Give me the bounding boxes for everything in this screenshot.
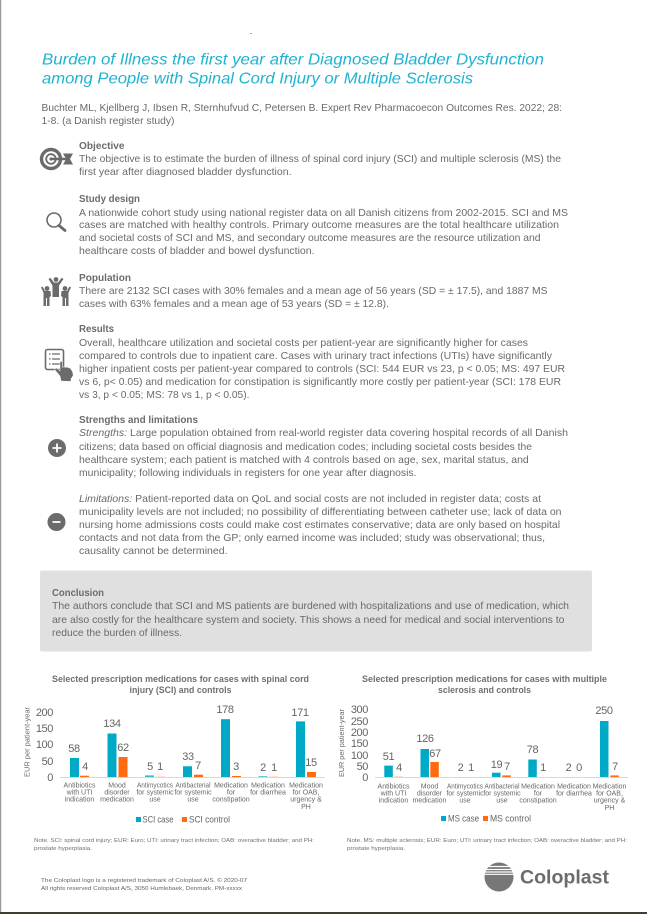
category labels: SCI: Antimycotics (137, 782, 173, 790)
category labels: SCI: use (149, 796, 161, 804)
chart title: SCI: Selected prescription medications for cases with spinal cord (52, 674, 309, 684)
bar chart: MS: 4 (396, 762, 402, 774)
text: results body: higher inpatient costs per patient-year compared to controls (SCI: 544 EUR vs 23, p < 0.05; MS: 497 EUR (79, 364, 565, 375)
bar chart: SCI: 4 (82, 761, 88, 773)
bar chart: MS: 7 (504, 761, 510, 773)
category labels: MS: for systemic (446, 790, 484, 798)
text: results body: vs 3, p < 0.05; MS: 78 vs 1, p < 0.05). (79, 390, 250, 401)
y axis: MS (337, 704, 368, 784)
icon: magnifier (47, 213, 65, 230)
category labels: SCI: Medication (289, 782, 323, 790)
text: population body: There are 2132 SCI cases with 30% females and a mean age of 56 years (SD = ± 17.5), and 1887 MS (79, 286, 548, 297)
text: limitations: municipality levels are not included; no possibility of differentiating between catheter use; lack of data on (79, 507, 562, 518)
text: study design body (79, 208, 568, 257)
y axis: SCI: 50 (42, 756, 53, 768)
category labels: MS: disorder (417, 790, 443, 798)
heading: conclusion: Conclusion (52, 588, 104, 599)
panel: strengths and limitations (48, 415, 568, 557)
legend: SCI: SCI control (189, 814, 230, 824)
category labels: SCI: with UTI (66, 790, 92, 796)
note: SCI: Note. SCI: spinal cord injury; EUR: Euro; UTI: urinary tract infection; OAB: overactive bladder; and PH: (34, 838, 314, 844)
icon: document with hand (46, 350, 73, 382)
category labels: SCI: Medication (214, 782, 248, 790)
category labels: MS: Mood (421, 784, 438, 790)
y axis: SCI: 150 (36, 723, 53, 735)
text: objective body: The objective is to estimate the burden of illness of spinal cord injury (SCI) and multiple sclerosis (MS) the (79, 154, 561, 165)
text: limitations: contacts and not data from the GP; only earned income was included; study was observational; thus, (79, 533, 545, 544)
text: results body: Overall, healthcare utilization and societal costs per patient-year are significantly higher for cases (79, 338, 528, 349)
text: population body (79, 286, 548, 310)
category labels: SCI: constipation (212, 796, 250, 804)
category labels: SCI: indication (65, 796, 94, 804)
text: strengths: municipality; following individuals in registers for one year after diagnosis. (79, 468, 416, 479)
heading: results: Results (79, 324, 114, 335)
category labels: SCI: for (227, 790, 236, 796)
bar chart: MS: 2 (458, 762, 464, 774)
category labels: SCI: for OAB, (293, 790, 319, 796)
text: conclusion body (52, 601, 569, 639)
chart title: SCI (52, 674, 309, 695)
category labels: MS: for OAB, (596, 790, 623, 798)
category labels: MS (378, 784, 627, 812)
y axis: SCI: EUR per patient-year (22, 706, 32, 777)
category labels: MS: medication (413, 798, 447, 804)
legend: SCI: SCI case (142, 814, 174, 824)
y axis: MS: 100 (351, 750, 368, 762)
panel: results (46, 324, 565, 401)
text: conclusion body: The authors conclude that SCI and MS patients are burdened with hospitalizations and use of medication, which (52, 601, 569, 612)
bar chart: SCI: 134 (103, 718, 121, 730)
note: MS: prostate hyperplasia. (347, 846, 405, 852)
logo: Coloplast (484, 862, 610, 892)
category labels: MS: Antibacterial (484, 784, 520, 790)
category labels: SCI: Mood (108, 782, 126, 790)
bar chart: SCI: 1 (157, 761, 163, 773)
bar chart: SCI (60, 704, 325, 778)
category labels: MS: Antimycotics (447, 784, 483, 790)
footer legal text: All rights reserved Coloplast A/S, 3050 Humlebaek, Denmark. PM-xxxxx (41, 886, 242, 892)
bar chart: MS: 2 (566, 762, 572, 774)
bar chart: MS: 78 (527, 744, 538, 756)
category labels: MS: PH (605, 805, 614, 812)
category labels: SCI: medication (100, 796, 134, 804)
chart title: MS: Selected prescription medications for cases with multiple (362, 674, 607, 684)
icon: target (42, 150, 73, 168)
bar chart: SCI: 178 (216, 704, 234, 716)
bar chart: SCI: 7 (195, 760, 201, 772)
bar chart: SCI: 171 (291, 707, 309, 719)
text: limitations: causality cannot be determined. (79, 546, 228, 557)
legend: MS: MS control (490, 814, 531, 824)
text: results body: compared to controls due to inpatient care. Cases with urinary tract infections (UTIs) have significantly (79, 351, 553, 362)
y axis: SCI (22, 706, 53, 784)
citation (42, 103, 562, 127)
footer legal text: The Coloplast logo is a registered trademark of Coloplast A/S. © 2020-07 (41, 877, 247, 884)
category labels: MS: for diarrhea (556, 790, 592, 798)
bar chart: SCI: 2 (260, 762, 266, 774)
panel: conclusion (40, 570, 592, 652)
y axis: MS: 250 (351, 716, 368, 728)
category labels: MS: for (534, 790, 543, 798)
logo: Coloplast: Coloplast (520, 868, 610, 888)
bar chart: MS: 250 (595, 705, 613, 717)
icon: minus (48, 513, 66, 531)
bar chart: SCI: 1 (271, 762, 277, 774)
footer legal text (41, 877, 247, 892)
y axis: MS: 150 (351, 738, 368, 750)
y axis: MS: 200 (351, 727, 368, 739)
category labels: MS: constipation (519, 798, 557, 804)
chart title: SCI: injury (SCI) and controls (130, 685, 232, 695)
icon: plus (48, 439, 66, 457)
category labels: SCI: disorder (104, 790, 130, 796)
text: strengths (79, 428, 568, 479)
bar chart: SCI: 5 (147, 761, 153, 773)
bar chart: SCI: 3 (233, 761, 239, 773)
chart title: MS (362, 674, 607, 695)
text: objective body (79, 154, 561, 178)
heading: objective: Objective (79, 141, 125, 152)
category labels: MS: for systemic (483, 790, 521, 798)
title: Burden of Illness the first year after Diagnosed Bladder Dysfunction (42, 52, 544, 68)
category labels: SCI: PH (301, 804, 311, 811)
bar chart: MS: 1 (540, 762, 546, 774)
category labels: SCI: Medication (251, 782, 285, 790)
y axis: MS: 0 (362, 772, 368, 784)
text: population body: cases with 63% females and a mean age of 53 years (SD = ± 12.8). (79, 299, 389, 310)
title: among People with Spinal Cord Injury or Multiple Sclerosis (42, 70, 473, 88)
note: SCI: prostate hyperplasia. (34, 846, 92, 852)
title (42, 52, 544, 88)
bar chart: MS: 7 (612, 761, 618, 773)
category labels: MS: use (459, 798, 471, 804)
category labels: SCI: for systemic (136, 790, 174, 796)
note: MS: Note. MS: multiple sclerosis; EUR: Euro; UTI: urinary tract infection; OAB: overactive bladder; and PH: (347, 838, 627, 844)
citation: Buchter ML, Kjellberg J, Ibsen R, Sternhufvud C, Petersen B. Expert Rev Pharmacoecon Outcomes Res. 2022; 28: (42, 103, 562, 114)
category labels: SCI: use (187, 796, 199, 804)
bar chart: MS (375, 705, 628, 778)
y axis: SCI: 0 (47, 772, 53, 784)
text: results body (79, 338, 565, 401)
panel: study design (47, 194, 568, 257)
note: SCI (34, 838, 314, 852)
panel: SCI chart (22, 674, 325, 852)
category labels: MS: Antibiotics (378, 784, 410, 790)
text: objective body: first year after diagnosed bladder dysfunction. (79, 167, 292, 178)
category labels: MS: Medication (521, 784, 555, 790)
text: study design body: cases are matched with healthy controls. Primary outcome measures are the total healthcare utilization (79, 220, 559, 231)
heading: strengths and limitations: Strengths and limitations (79, 415, 198, 426)
text: results body: vs 6, p< 0.05) and medication for constipation is significantly more costly per patient-year (SCI: 178 EUR (79, 377, 561, 388)
legend: SCI (136, 814, 230, 824)
bar chart: SCI: 33 (182, 751, 194, 763)
category labels: MS: Medication (593, 784, 627, 790)
category labels: SCI: Antibiotics (64, 782, 96, 790)
category labels: MS: indication (379, 798, 408, 804)
category labels: SCI: urgency & (290, 796, 322, 804)
bar chart: MS: 67 (429, 748, 441, 760)
bar chart: MS: 19 (491, 759, 502, 771)
bar chart: MS: 0 (576, 762, 582, 774)
bar chart: SCI: 62 (117, 742, 129, 754)
text: conclusion body: are also costly for the healthcare system and society. This shows a need for medical and social interventions to (52, 615, 565, 626)
category labels: SCI (64, 782, 323, 811)
y axis: SCI: 100 (36, 739, 53, 751)
bar chart: SCI: 15 (305, 757, 317, 769)
bar chart: SCI: 58 (68, 743, 80, 755)
bar chart: MS: 126 (416, 733, 434, 745)
heading: study design: Study design (79, 194, 140, 205)
y axis: MS: EUR per patient-year (337, 708, 346, 777)
panel: objective (42, 141, 561, 178)
panel: population (41, 273, 548, 310)
category labels: SCI: for systemic (174, 790, 212, 796)
category labels: MS: Medication (557, 784, 591, 790)
text: strengths: Strengths: Large population obtained from real-world register data covering hospital records of all Danish (79, 428, 568, 439)
citation: 1-8. (a Danish register study) (42, 116, 174, 127)
icon: people (41, 277, 71, 306)
y axis: SCI: 200 (36, 707, 53, 719)
text: study design body: healthcare costs of bladder and bowel dysfunction. (79, 246, 314, 257)
category labels: SCI: for diarrhea (250, 790, 286, 796)
text: limitations (79, 494, 562, 557)
bar chart: MS: 51 (383, 751, 394, 763)
text: limitations: nursing home admissions costs could make cost estimates conservative; data are only based on hospital (79, 520, 560, 531)
panel: MS chart (337, 674, 628, 852)
text: strengths: healthcare system; each patient is matched with 4 controls based on age, sex, marital status, and (79, 455, 529, 466)
legend: MS: MS case (448, 814, 479, 824)
text: conclusion body: reduce the burden of illness. (52, 628, 182, 639)
legend: MS (441, 814, 531, 824)
chart title: MS: sclerosis and controls (438, 685, 531, 695)
category labels: MS: use (496, 798, 508, 804)
text: strengths: citizens; data based on official diagnosis and medication codes; including societal costs besides the (79, 442, 532, 453)
heading: population: Population (79, 273, 131, 284)
y axis: MS: 50 (357, 761, 368, 773)
text: study design body: A nationwide cohort study using national register data on all Danish citizens from 2002-2015. SCI and MS (79, 208, 568, 219)
category labels: MS: urgency & (594, 798, 626, 804)
text: study design body: and societal costs of SCI and MS, and secondary outcome measures are the resource utilization and (79, 233, 541, 244)
note: MS (347, 838, 627, 852)
bar chart: MS: 1 (468, 762, 474, 774)
category labels: SCI: Antibacterial (176, 782, 211, 790)
y axis: MS: 300 (351, 704, 368, 716)
category labels: MS: with UTI (380, 790, 406, 798)
text: limitations: Limitations: Patient-reported data on QoL and social costs are not included in register data; costs at (79, 494, 541, 505)
